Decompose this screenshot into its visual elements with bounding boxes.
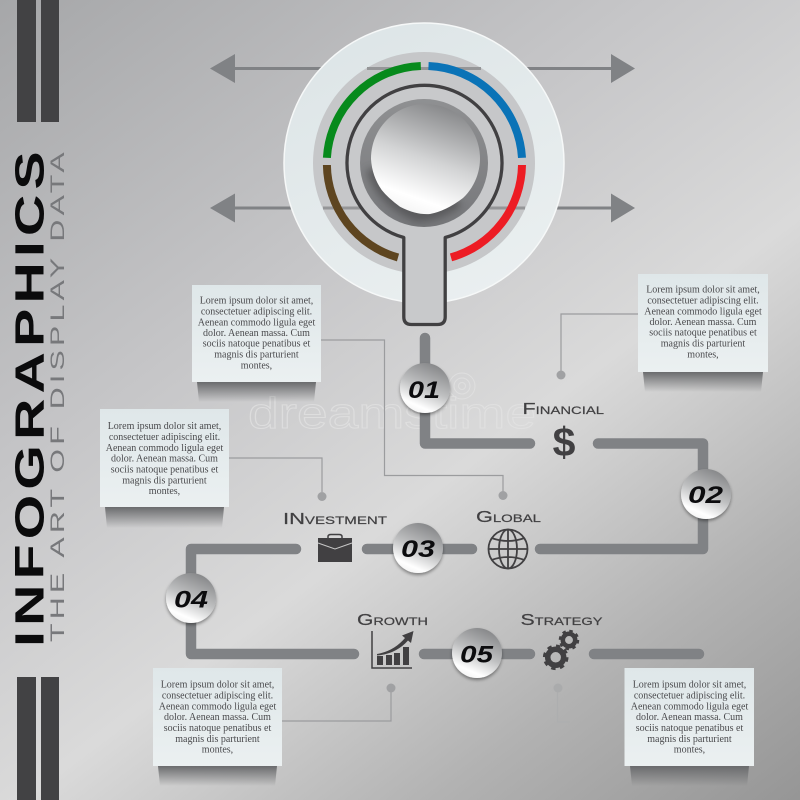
panel: text box middle left: dolor. Aenean massa. Cum [111,454,218,465]
arc: green [327,66,421,158]
watermark [248,373,536,438]
panel: text box bottom right: dolor. Aenean massa. Cum [636,712,743,723]
panel: text box bottom left: montes, [202,744,233,756]
badge 02 [681,469,731,519]
panel: text box middle left [100,409,229,528]
panel: text box bottom left: consectetuer adipiscing elit. [162,690,273,702]
knob shadow [366,160,462,222]
label: Financial: Financial [522,401,604,418]
badge 01 [400,363,450,413]
icon: growth chart [372,631,414,668]
panel: text box top left [192,285,321,402]
subtitle: THE ART OF DISPLAY DATA [48,152,68,642]
panel: text box top right [638,274,768,392]
panel: text box middle left: Lorem ipsum dolor sit amet, [108,421,221,432]
icon: globe [488,530,528,568]
panel: text box bottom left [153,668,282,786]
arc: brown [327,165,398,258]
panel: text box top left: Aenean commodo ligula eget [198,317,315,328]
panel: text box top right: montes, [687,349,719,360]
keyhole outline [347,85,502,325]
panel: text box bottom right: Aenean commodo ligula eget [631,702,748,712]
dial [284,23,564,324]
panel: text box bottom right [624,668,754,786]
panel: text box bottom left: magnis dis parturient [175,734,260,745]
panel: text box top left: Lorem ipsum dolor sit amet, [200,295,313,306]
panel: text box bottom right: magnis dis parturient [647,734,732,745]
panel: text box top right: Aenean commodo ligula eget [644,306,762,317]
badge 05: 05 [460,642,494,668]
badge 01: 01 [408,377,440,404]
watermark: dreamstime [248,389,536,438]
panel: text box middle left: montes, [149,486,180,497]
bottom double bars [17,677,59,800]
panel: text box top left: montes, [241,360,272,371]
panel: text box middle left: magnis dis parturient [122,475,207,486]
panel: text box bottom right: Lorem ipsum dolor sit amet, [633,680,746,690]
badge 04: 04 [174,586,208,614]
label: Investment: INvestment [283,511,387,528]
connectors [229,314,638,722]
gray ring [360,99,488,227]
panel: text box bottom left: Lorem ipsum dolor sit amet, [161,680,274,690]
icon: gears [544,631,578,669]
label: Global: Global [476,509,541,526]
outer circle [284,23,564,303]
inner disc [313,52,535,274]
panel: text box middle left: Aenean commodo ligula eget [106,443,223,454]
panel: text box middle left: sociis natoque penatibus et [111,464,218,475]
panel: text box top right: sociis natoque penatibus et [649,328,757,339]
badge 03 [393,523,443,573]
icon: briefcase [318,534,352,562]
icon: dollar: $ [553,419,576,465]
panel: text box bottom right: montes, [674,744,705,756]
panel: text box top left: magnis dis parturient [214,350,299,361]
panel: text box middle left: consectetuer adipiscing elit. [109,432,220,443]
panel: text box top left: dolor. Aenean massa. Cum [203,328,310,339]
connector dots [318,370,566,692]
panel: text box top right: magnis dis parturient [661,339,745,350]
label: Growth: Growth [357,612,428,629]
badge 02: 02 [688,482,724,509]
badge 05 [452,628,502,678]
knob [371,104,480,214]
label: Strategy: Strategy [520,612,603,629]
top double bars [17,0,59,122]
badge 04 [166,573,216,623]
panel: text box top right: Lorem ipsum dolor sit amet, [646,284,760,295]
arc: red [451,165,522,257]
arc: blue [428,66,522,158]
panel: text box bottom left: sociis natoque penatibus et [164,723,271,734]
panel: text box bottom left: dolor. Aenean massa. Cum [164,712,271,723]
panel: text box bottom right: consectetuer adipiscing elit. [634,690,745,702]
arrows [210,54,635,222]
badge 03: 03 [401,536,436,563]
panel: text box top left: consectetuer adipiscing elit. [201,306,312,317]
panel: text box top right: consectetuer adipiscing elit. [647,295,759,306]
panel: text box top left: sociis natoque penatibus et [203,339,310,350]
flow path [191,338,703,654]
panel: text box bottom right: sociis natoque penatibus et [636,723,743,734]
panel: text box top right: dolor. Aenean massa. Cum [650,317,757,328]
panel: text box bottom left: Aenean commodo ligula eget [159,702,276,712]
title: INFOGRAPHICS: INFOGRAPHICS [7,151,53,647]
